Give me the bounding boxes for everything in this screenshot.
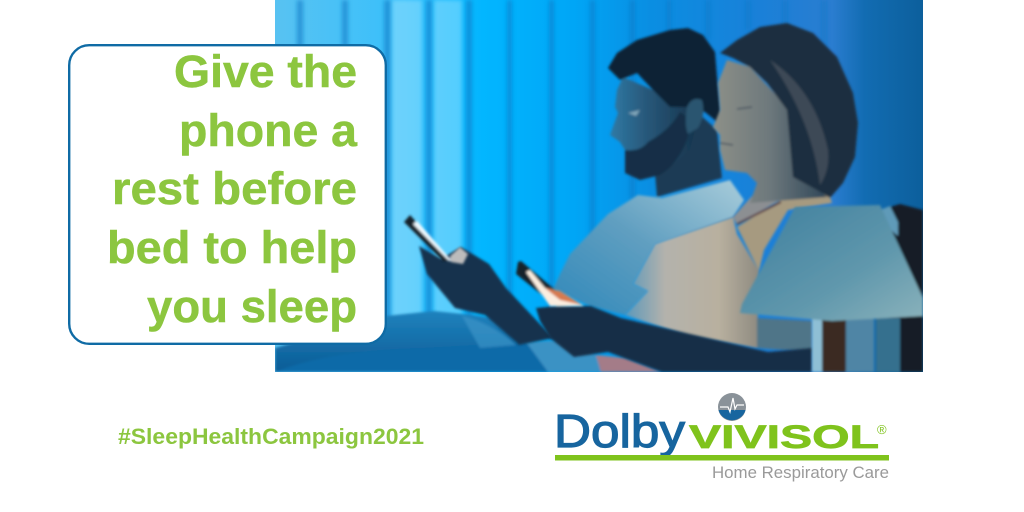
logo wordmark: Dolby: Dolby [554, 405, 685, 457]
logo: Dolby Vivisol [554, 393, 889, 482]
blue curtain wall [275, 0, 923, 372]
headline text: phone a [179, 105, 358, 156]
phone: man [404, 215, 468, 264]
bedside headboard and lamp [740, 204, 923, 372]
headline text: Give the [174, 46, 357, 97]
woman [625, 23, 858, 352]
headline text: bed to help [107, 222, 357, 273]
phone: woman [516, 261, 584, 307]
photo: couple using phones in bed [275, 0, 923, 372]
man's arm and hand [419, 246, 553, 345]
callout: headline box [69, 45, 386, 344]
logo wordmark: Vivisol: VIVISOL [689, 419, 879, 455]
logo tagline: Home Respiratory Care [712, 464, 889, 482]
woman's arm and hand [536, 306, 812, 372]
headline text: you sleep [147, 281, 357, 332]
campaign hashtag: #SleepHealthCampaign2021 [118, 424, 424, 449]
headline text: rest before [112, 163, 357, 214]
man [553, 28, 744, 315]
logo registered mark: ® [877, 422, 887, 437]
headline text [107, 46, 358, 332]
duvet [275, 311, 662, 372]
logo icon: heartbeat circle [718, 393, 746, 421]
logo green bar [555, 455, 889, 460]
